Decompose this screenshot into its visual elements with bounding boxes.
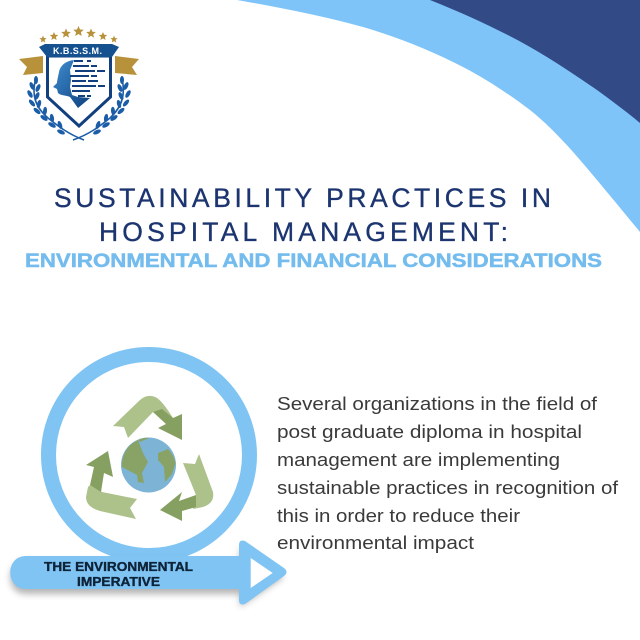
- arrow banner: [10, 540, 286, 604]
- title: [54, 183, 551, 247]
- title: HOSPITAL MANAGEMENT:: [99, 217, 508, 247]
- body text: this in order to reduce their: [277, 505, 520, 526]
- arrow banner shadow: [10, 548, 284, 607]
- top recycling arrow: [113, 396, 182, 440]
- logo lettering: K.B.S.S.M.: [53, 46, 102, 56]
- body text: management are implementing: [277, 449, 560, 470]
- logo: [19, 26, 139, 140]
- banner label: THE ENVIRONMENTAL: [44, 560, 193, 574]
- body text: sustainable practices in recognition of: [277, 477, 619, 498]
- logo head profile: [53, 60, 105, 108]
- globe: [121, 438, 176, 492]
- logo laurels: [26, 76, 132, 140]
- logo ribbons: [19, 56, 139, 75]
- banner label: [44, 560, 193, 589]
- banner label: IMPERATIVE: [77, 575, 160, 589]
- left recycling arrow: [86, 451, 137, 519]
- arrow banner white triangle: [251, 558, 273, 588]
- icon: recycling arrows with globe: [86, 396, 213, 521]
- body text: environmental impact: [277, 532, 474, 553]
- body text: [277, 393, 619, 553]
- title: SUSTAINABILITY PRACTICES IN: [54, 183, 551, 213]
- logo header band: [39, 44, 119, 57]
- logo stars: [39, 26, 118, 42]
- right recycling arrow: [160, 454, 213, 521]
- corner wave: dark navy: [430, 0, 640, 123]
- body text: Several organizations in the field of: [277, 393, 598, 414]
- subtitle: ENVIRONMENTAL AND FINANCIAL CONSIDERATIONS: [25, 250, 602, 272]
- corner wave: light blue: [237, 0, 640, 232]
- logo shield: [48, 56, 110, 126]
- circle frame: [48, 354, 250, 556]
- body text: post graduate diploma in hospital: [277, 421, 582, 442]
